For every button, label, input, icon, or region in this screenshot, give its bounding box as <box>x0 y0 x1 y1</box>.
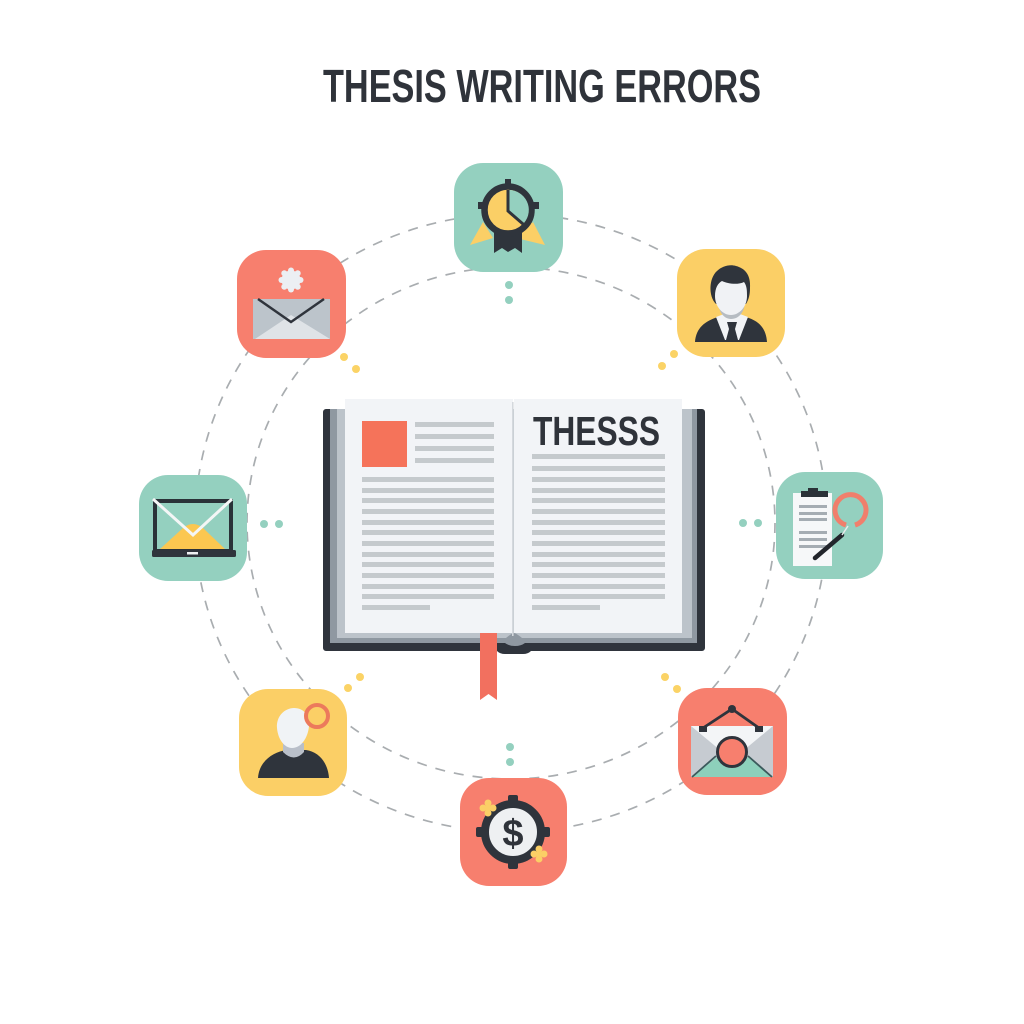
dashed orbit rings <box>195 214 827 832</box>
icon tile: dollar target: $ <box>502 813 524 855</box>
icon tile: businessman <box>677 249 785 357</box>
icon tile: person with ring <box>239 689 347 796</box>
icon tile: envelope with target <box>678 688 787 795</box>
icon tile: clipboard checklist <box>776 472 883 579</box>
book cover <box>323 409 705 654</box>
page stack <box>330 409 697 646</box>
connector dots <box>260 281 762 766</box>
icon tile: envelope with seal <box>237 250 346 358</box>
right page text lines <box>532 454 665 610</box>
icon tile: award clock <box>454 163 563 272</box>
red image block <box>362 421 407 467</box>
icon tile: dollar target <box>460 778 567 886</box>
bookmark <box>480 633 497 700</box>
page heading: THESSS <box>533 408 660 454</box>
left page text lines <box>362 422 494 610</box>
right page <box>514 399 682 633</box>
left page <box>345 399 513 633</box>
icon tile: laptop mail <box>139 475 247 581</box>
central open book <box>323 399 705 700</box>
title: THESIS WRITING ERRORS <box>323 60 761 112</box>
